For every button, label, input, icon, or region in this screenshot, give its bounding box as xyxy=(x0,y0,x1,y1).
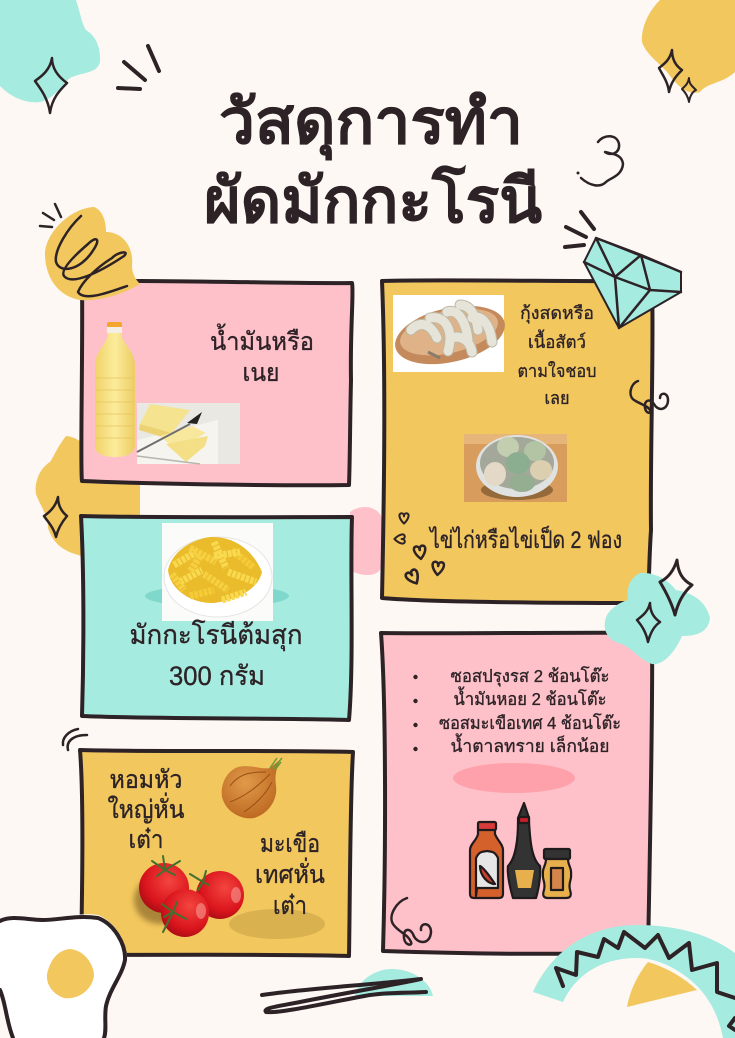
decoration: fried egg xyxy=(0,914,127,1038)
title: วัสดุการทำ xyxy=(219,88,523,160)
icon: sauce bottles xyxy=(470,803,571,898)
image: oil bottle xyxy=(95,322,135,457)
sauce list: น้ำตาลทราย เล็กน้อย xyxy=(450,733,610,756)
sauce list: ซอสมะเขือเทศ 4 ช้อนโต๊ะ xyxy=(439,713,621,733)
decoration: sparkles right xyxy=(637,560,692,642)
label: eggs: ไข่ไก่หรือไข่เป็ด 2 ฟอง xyxy=(428,525,622,554)
icon: hearts xyxy=(394,513,444,586)
label: macaroni xyxy=(130,620,302,691)
label: oil or butter xyxy=(210,323,314,387)
sauce list: ซอสปรุงรส 2 ช้อนโต๊ะ xyxy=(450,666,610,687)
label: tomato: มะเขือ xyxy=(260,830,320,858)
decoration: teal blob right xyxy=(605,573,710,664)
decoration: swirl right of panel xyxy=(631,381,668,413)
label: macaroni: มักกะโรนีต้มสุก xyxy=(130,620,302,652)
label: macaroni: 300 กรัม xyxy=(169,661,265,691)
panel: shrimp and eggs xyxy=(382,280,653,603)
image: butter xyxy=(137,403,240,464)
label: oil or butter: น้ำมันหรือ xyxy=(210,323,314,356)
ellipse shadow xyxy=(145,585,289,607)
ellipse shadow xyxy=(453,763,575,793)
decoration: lines top left xyxy=(118,46,159,89)
image: shrimp plate xyxy=(389,295,511,374)
decoration: yellow wedge xyxy=(627,962,697,1007)
label: shrimp: กุ้งสดหรือ xyxy=(520,303,594,324)
sauce list: น้ำมันหอย 2 ช้อนโต๊ะ xyxy=(454,686,606,709)
image: eggs in bowl xyxy=(464,434,567,502)
decoration: diamond xyxy=(584,238,681,328)
label: onion: หอมหัว xyxy=(110,766,182,794)
label: oil or butter: เนย xyxy=(242,359,280,387)
decoration: whisk lines xyxy=(262,979,426,1012)
panel: oil or butter xyxy=(81,281,353,485)
icon: swirl xyxy=(391,898,431,945)
label: shrimp xyxy=(518,303,596,408)
panel: macaroni xyxy=(81,516,352,720)
label: tomato: เทศหั่น xyxy=(255,857,325,889)
panel: onion and tomato xyxy=(80,750,353,956)
decoration: teal arc xyxy=(533,925,735,1038)
image: onion xyxy=(222,758,282,818)
decoration: lines above onion panel xyxy=(63,729,87,750)
decoration: sparkle left xyxy=(44,497,67,537)
decoration: teal blob top left xyxy=(0,0,100,102)
decoration: yellow blob left behind panels xyxy=(36,436,140,556)
label: shrimp: ตามใจชอบ xyxy=(518,361,596,381)
panel: sauces xyxy=(381,633,652,954)
decoration: lines near diamond xyxy=(565,212,594,247)
label: tomato: เต๋า xyxy=(273,892,307,920)
ellipse shadow xyxy=(229,909,325,939)
decoration: yellow blob top right xyxy=(642,0,735,93)
decoration: teal blob bottom xyxy=(355,969,433,996)
decoration: squiggle dot xyxy=(576,172,580,174)
decoration: squiggle near title xyxy=(581,136,623,185)
decoration: sparkles top right xyxy=(659,50,696,102)
label: shrimp: เนื้อสัตว์ xyxy=(528,329,586,352)
decoration: pink blob centre xyxy=(350,507,386,575)
decoration: zigzag xyxy=(556,932,735,1030)
image: tomatoes xyxy=(134,856,244,937)
image: macaroni plate xyxy=(162,523,273,621)
title xyxy=(204,88,542,236)
decoration: yellow leaf with scribble xyxy=(40,204,140,300)
label: onion: ใหญ่หั่น xyxy=(108,792,184,824)
title: ผัดมักกะโรนี xyxy=(204,164,542,236)
label: tomato xyxy=(255,830,325,920)
label: onion xyxy=(108,766,184,854)
sauce list xyxy=(413,666,621,756)
decoration: sparkle top left xyxy=(35,58,67,113)
label: shrimp: เลย xyxy=(544,388,570,408)
label: onion: เต๋า xyxy=(128,826,164,854)
